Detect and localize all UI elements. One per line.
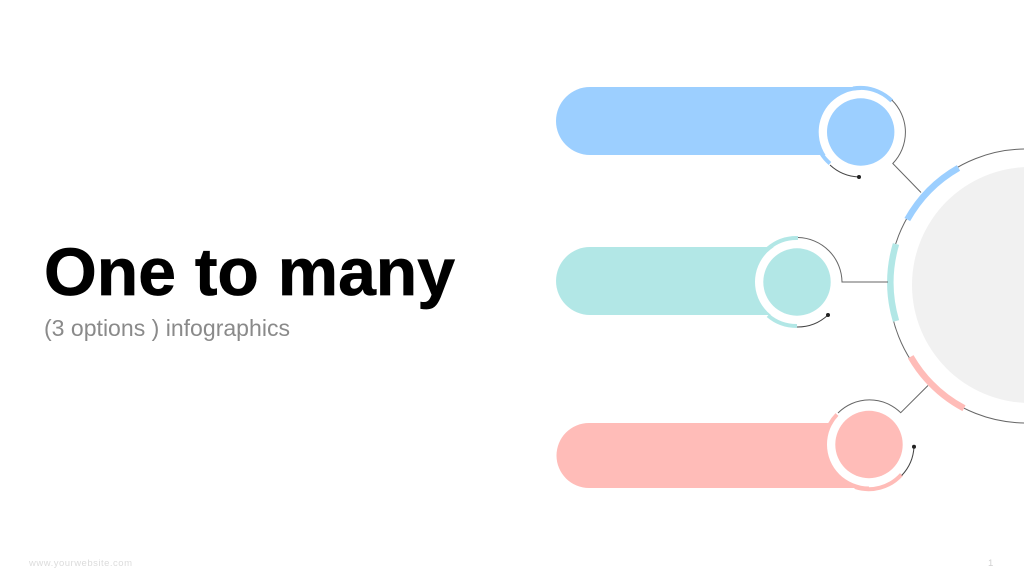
blue thin arcs xyxy=(892,100,921,192)
footer website: www.yourwebsite.com xyxy=(28,558,132,569)
hub blue arc xyxy=(907,168,958,220)
option 3: pink xyxy=(556,386,928,489)
option 1: blue xyxy=(556,87,921,192)
title: One to many xyxy=(44,235,455,310)
teal thin arcs xyxy=(798,238,888,282)
blue disc xyxy=(827,98,894,166)
central hub xyxy=(889,149,1024,423)
page number: 1 xyxy=(988,558,993,569)
hub outer ring xyxy=(889,149,1024,423)
teal ring gap xyxy=(755,240,839,324)
teal disc xyxy=(763,248,831,316)
teal dot xyxy=(826,313,830,317)
option 2: teal xyxy=(556,238,888,327)
hub grey disc xyxy=(912,167,1024,403)
pink bar xyxy=(556,423,869,488)
pink dot xyxy=(912,445,916,449)
teal thick arcs xyxy=(768,238,798,248)
blue ring gap xyxy=(819,90,903,174)
blue thick arcs xyxy=(853,88,892,101)
teal bar xyxy=(556,247,797,315)
pink thick arcs xyxy=(830,414,837,424)
pink disc xyxy=(835,411,903,478)
hub teal arc xyxy=(890,244,896,321)
pink ring gap xyxy=(827,402,911,486)
pink thin arcs xyxy=(838,386,928,413)
blue dot xyxy=(857,175,861,179)
hub pink arc xyxy=(911,357,964,408)
blue bar xyxy=(556,87,861,155)
subtitle: (3 options ) infographics xyxy=(44,315,290,341)
